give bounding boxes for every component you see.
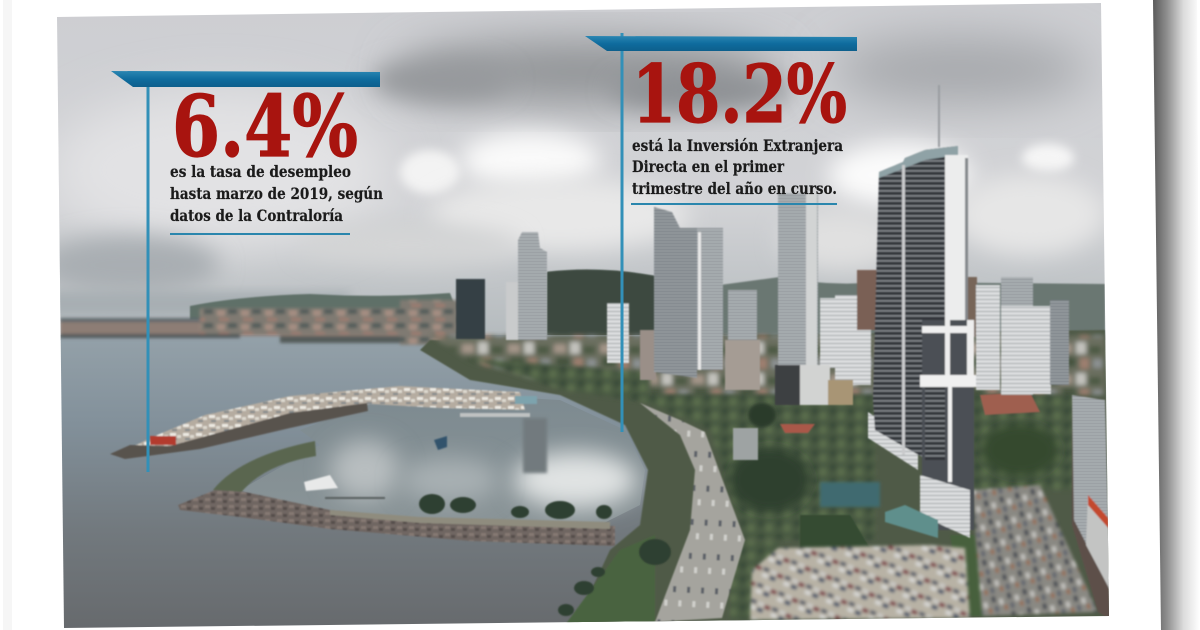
side avenue with traffic — [972, 485, 1098, 616]
city ground and vegetation — [420, 330, 1112, 625]
callout description: Directa en el primer — [632, 157, 785, 176]
skyline towers — [456, 85, 1110, 620]
callout description: hasta marzo de 2019, según — [170, 184, 383, 203]
callout rule — [620, 33, 624, 432]
callout header bar — [585, 36, 857, 51]
stepped glass tower — [654, 207, 723, 378]
callout description: es la tasa de desempleo — [170, 162, 351, 181]
callout underline — [631, 203, 837, 205]
white waterfront tower — [506, 232, 547, 340]
callout description — [632, 136, 843, 198]
lower slab building at base of main tower — [868, 412, 918, 470]
palm trees along the shore — [558, 539, 671, 616]
curved breakwater — [178, 441, 615, 546]
slender central tower — [775, 193, 853, 405]
figure: 18.2%: 18.2% — [632, 47, 847, 141]
left page edge — [3, 0, 12, 630]
callout description — [170, 162, 383, 225]
callout: unemployment rate — [111, 71, 383, 472]
callout underline — [170, 233, 350, 235]
right edge tall building — [1072, 395, 1110, 620]
inner bay with reflections — [240, 395, 645, 525]
parking lot with cars — [750, 545, 970, 620]
callout header bar — [111, 71, 380, 87]
front tower with white frame — [885, 320, 976, 538]
small towers — [607, 270, 879, 390]
sea — [50, 335, 750, 630]
main dark tower — [873, 85, 968, 470]
distant hills — [190, 270, 1105, 350]
callout description: está la Inversión Extranjera — [632, 136, 843, 155]
waterfront trees — [419, 494, 612, 519]
callout description: datos de la Contraloría — [170, 206, 343, 225]
marina peninsula with moored boats — [110, 386, 537, 499]
far shoreline — [60, 300, 470, 345]
callout: foreign direct investment — [585, 33, 857, 432]
right page shadow — [1153, 0, 1200, 630]
callout rule — [146, 72, 150, 472]
main coastal avenue — [640, 403, 745, 622]
east residential towers — [963, 277, 1069, 395]
figure: 6.4%: 6.4% — [172, 77, 358, 176]
dark glass tower — [456, 279, 485, 339]
callout description: trimestre del año en curso. — [632, 179, 837, 198]
sky with clouds — [40, 0, 1115, 340]
